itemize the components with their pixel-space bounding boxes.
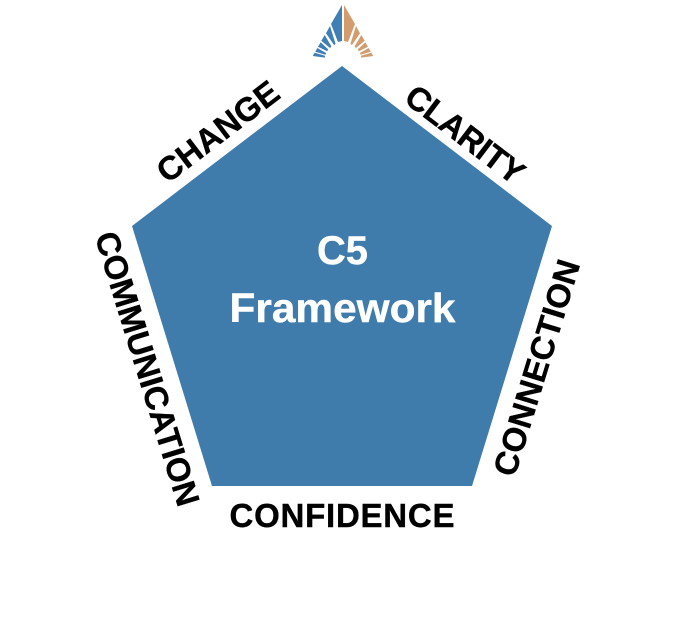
heading: C5: C5 [317, 229, 368, 273]
icon: fan logo [313, 5, 373, 58]
panel: blue pentagon [132, 66, 552, 486]
heading: Framework: Framework [230, 285, 456, 331]
label: CHANGE: CHANGE [149, 73, 286, 190]
label: CONNECTION: CONNECTION [486, 255, 587, 480]
label: CONFIDENCE: CONFIDENCE [230, 497, 454, 534]
logo: blue left half [313, 5, 342, 58]
label: COMMUNICATION: COMMUNICATION [88, 227, 207, 510]
logo: tan right half [344, 5, 373, 58]
label: CLARITY: CLARITY [398, 77, 532, 192]
